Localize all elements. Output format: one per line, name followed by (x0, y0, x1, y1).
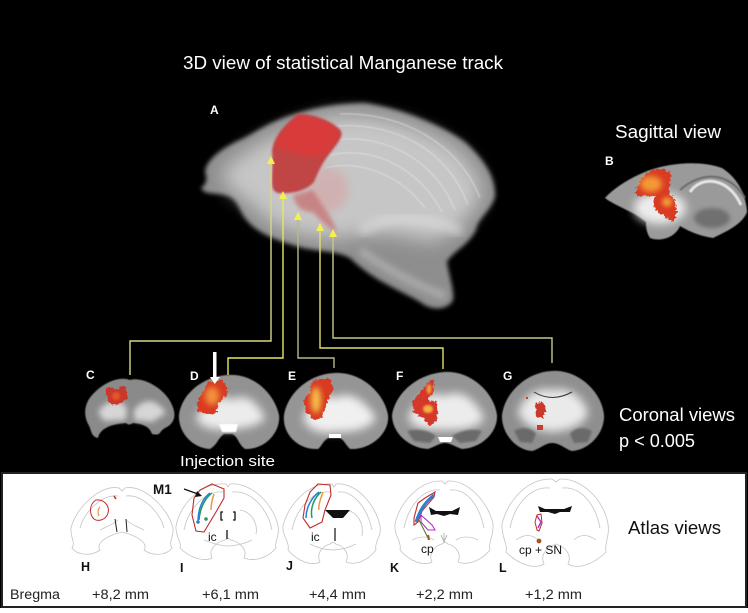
panel label A: A (210, 103, 219, 117)
sagittal panel B (605, 154, 747, 240)
coronal section G (502, 369, 604, 451)
injection site label: Injection site (180, 453, 275, 470)
sagittal view heading: Sagittal view (615, 122, 722, 142)
atlas panel (2, 473, 746, 607)
atlas section L: L (499, 561, 507, 575)
coronal section C (85, 368, 174, 438)
cp + SN label: cp + SN (519, 543, 562, 557)
label G: G (503, 369, 512, 383)
bregma coordinates row: +6,1 mm (202, 587, 259, 602)
coronal views caption: Coronal views (619, 405, 735, 425)
ic label J: ic (311, 530, 320, 544)
coronal section D (179, 352, 279, 449)
M1 label and arrow: M1 (153, 482, 172, 497)
atlas section J (283, 484, 380, 573)
atlas section K (390, 481, 493, 575)
red statistical track volume (272, 114, 348, 232)
sagittal MRI slice (605, 163, 747, 240)
arrow C to A (130, 156, 275, 375)
bregma coordinates row (10, 587, 582, 602)
label F: F (396, 369, 403, 383)
atlas views heading: Atlas views (628, 518, 721, 538)
panel label B: B (605, 154, 614, 168)
atlas section L (499, 479, 608, 575)
bregma coordinates row: +4,4 mm (309, 587, 366, 602)
label E: E (288, 369, 296, 383)
heat map E (304, 378, 333, 420)
M1 outline and tracts (192, 484, 224, 532)
atlas section I (153, 482, 278, 575)
coronal section E (284, 369, 388, 449)
atlas section I: I (180, 561, 183, 575)
heat map D (197, 380, 228, 415)
heat map F (412, 380, 438, 426)
label C: C (86, 368, 95, 382)
arrow F to A (316, 223, 443, 369)
bregma coordinates row: +8,2 mm (92, 587, 149, 602)
3D brain panel A (201, 103, 495, 308)
ic label I: ic (208, 530, 217, 544)
bregma coordinates row: +1,2 mm (525, 587, 582, 602)
K outline and tracts (414, 492, 435, 540)
atlas section K: K (390, 561, 399, 575)
heat map G (526, 397, 546, 430)
heat map C (106, 385, 128, 405)
bregma coordinates row: +2,2 mm (416, 587, 473, 602)
coronal section F (392, 369, 497, 449)
L outline and nucleus (535, 514, 542, 543)
atlas section H: H (81, 560, 90, 574)
atlas section J: J (286, 559, 293, 573)
arrow D to A (228, 191, 287, 375)
atlas section H (71, 488, 173, 574)
bregma coordinates row: Bregma (10, 587, 61, 602)
label D: D (190, 369, 199, 383)
sagittal heat map (636, 169, 677, 222)
coronal views caption (619, 405, 735, 451)
arrow G to A (329, 229, 552, 363)
cp label K: cp (421, 542, 434, 556)
arrow E to A (294, 212, 334, 368)
3D brain volume (201, 103, 495, 308)
white strip below panel (0, 608, 748, 613)
title: 3D view of statistical Manganese track (183, 52, 504, 73)
injection arrow (210, 352, 220, 384)
J outline and tracts (303, 484, 331, 528)
yellow connector arrows (130, 156, 552, 375)
coronal views caption: p < 0.005 (619, 431, 695, 451)
